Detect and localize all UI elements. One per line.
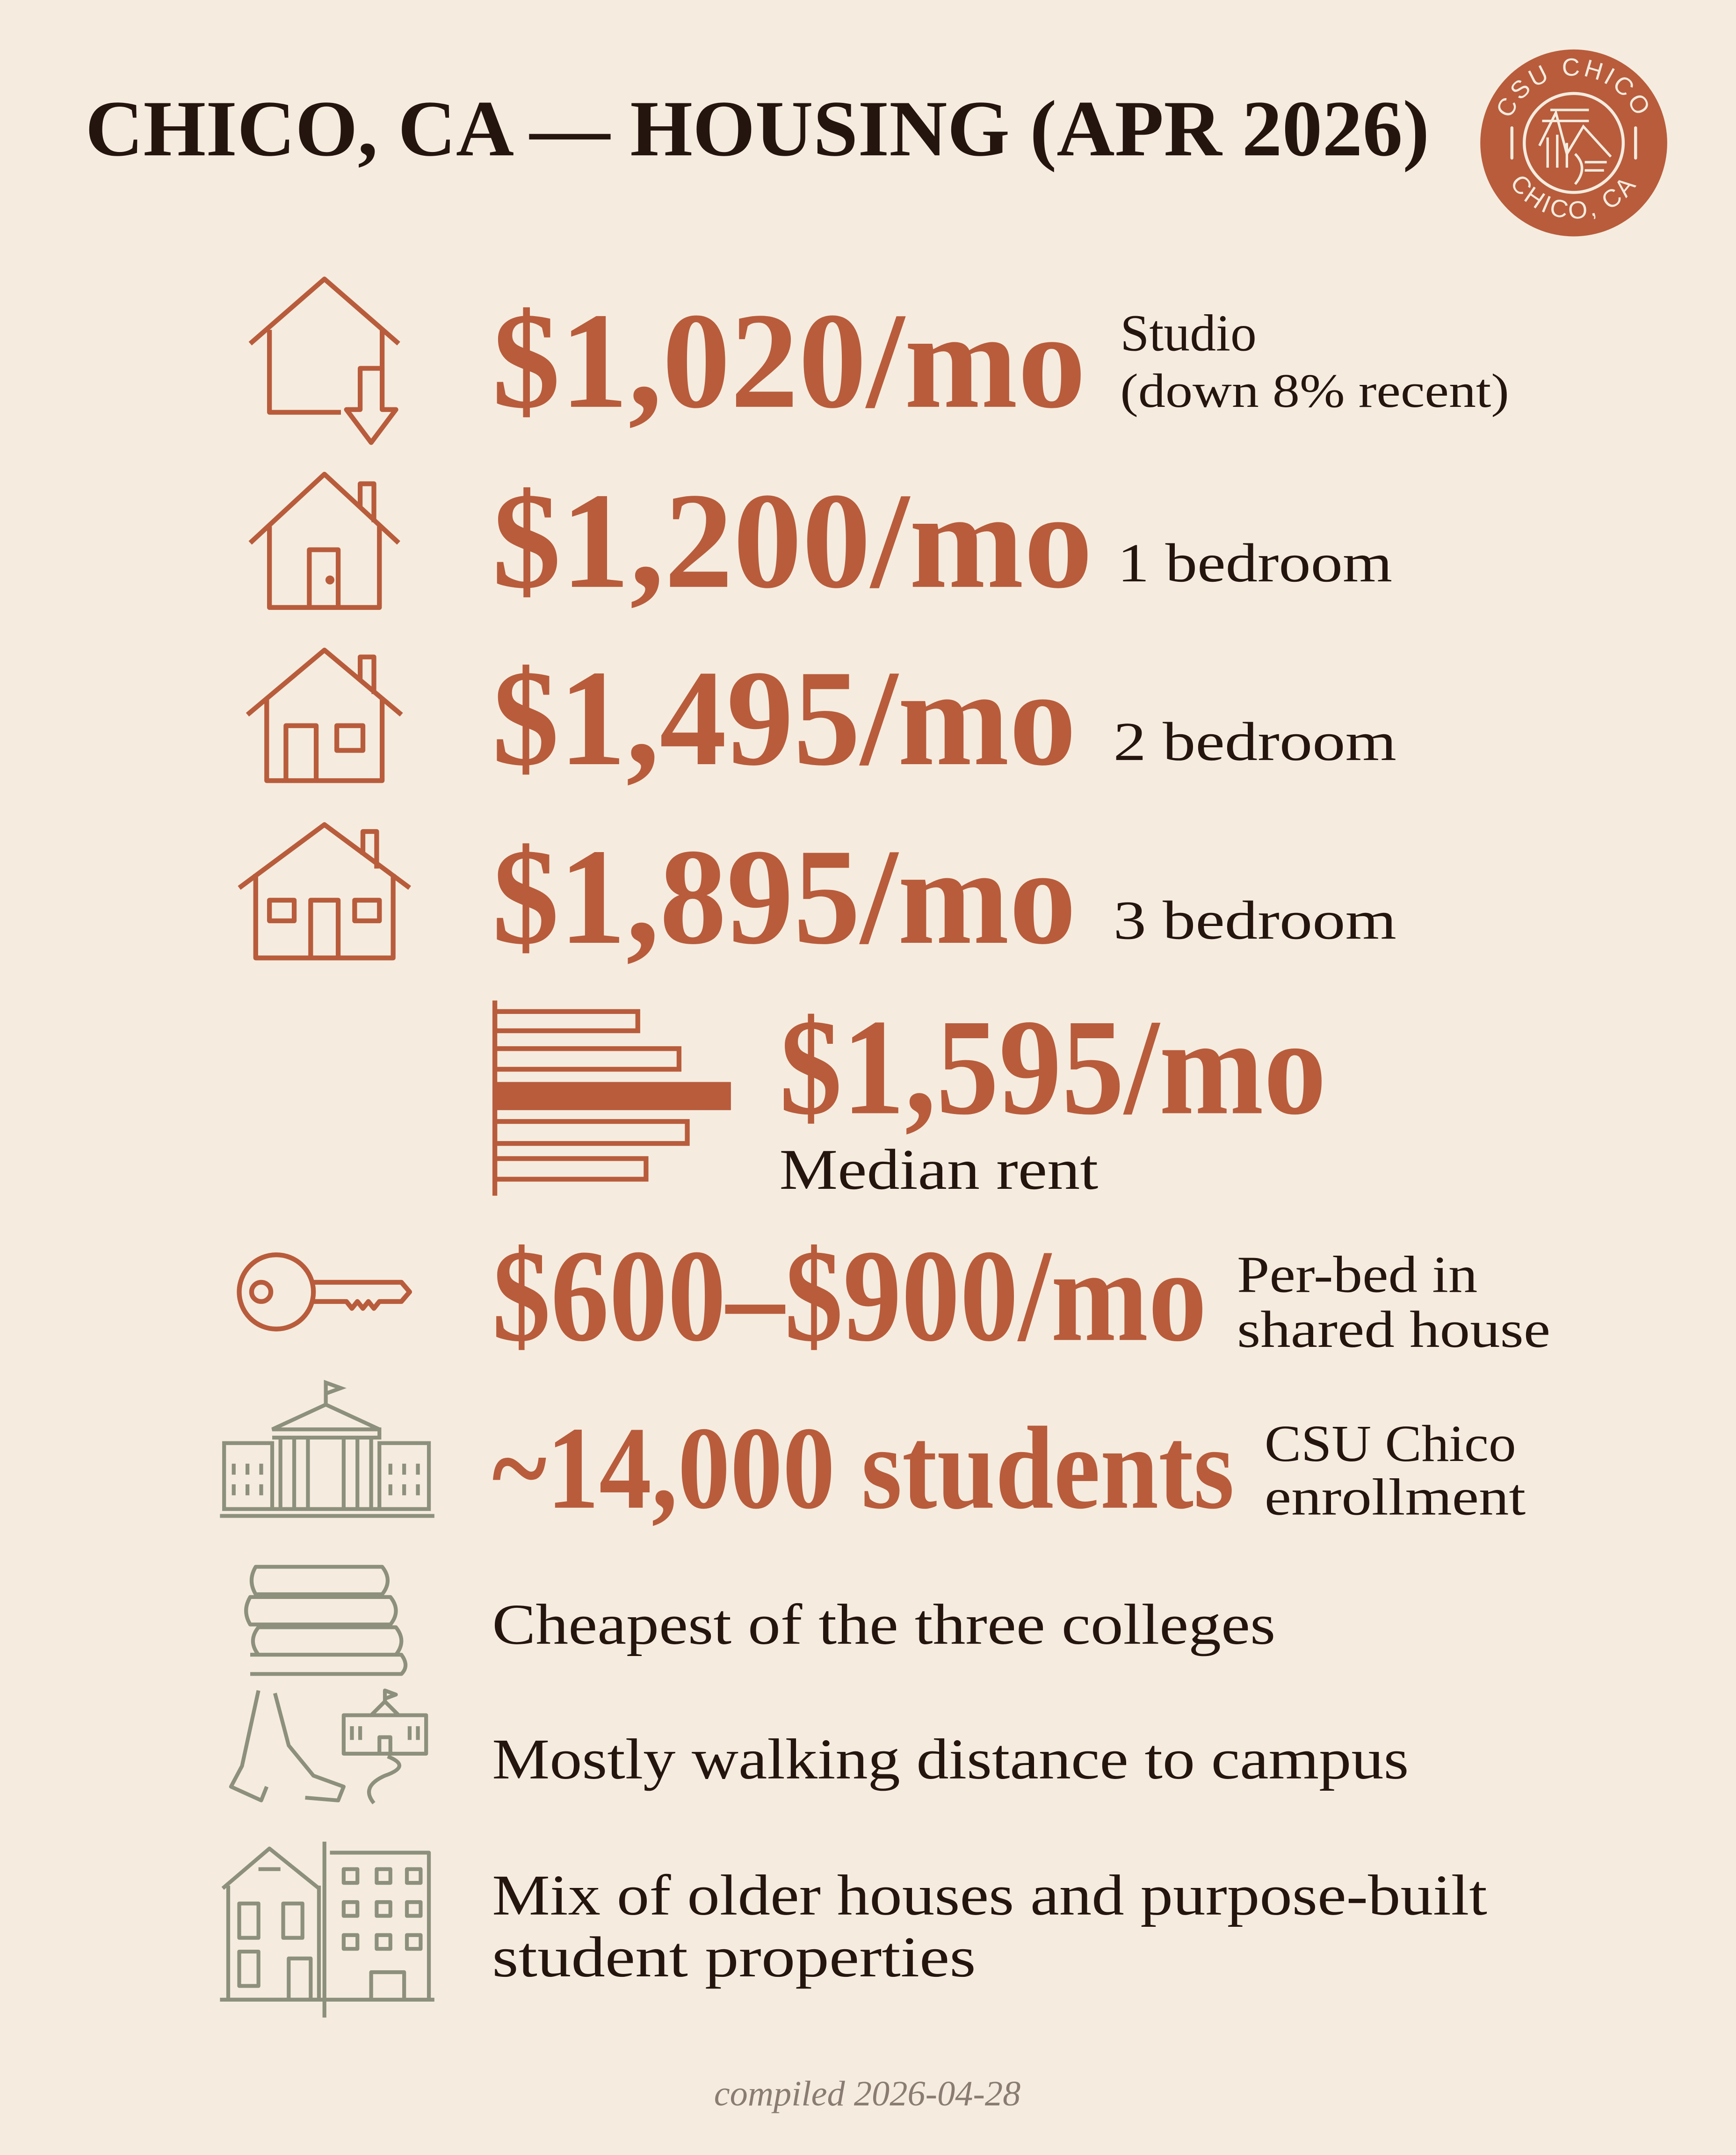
label: studio: (down 8% recent) [1120, 364, 1509, 418]
fact: housing mix [492, 1863, 1487, 1989]
label: enrollment: enrollment [1265, 1468, 1526, 1526]
icon: university building [220, 1382, 434, 1516]
title: CHICO, CA — HOUSING (APR 2026) [85, 84, 1429, 173]
fact: housing mix: Mix of older houses and purpose-built [492, 1863, 1487, 1927]
label: median rent: Median rent [779, 1137, 1098, 1201]
stat: enrollment: ~14,000 students [492, 1403, 1234, 1533]
label: studio [1120, 304, 1509, 418]
icon: walking to campus [231, 1691, 426, 1803]
price: 3 bedroom: $1,895/mo [492, 820, 1076, 973]
icon: 3 bedroom house [239, 824, 410, 958]
fact: housing mix: student properties [492, 1925, 976, 1989]
label: 2 bedroom: 2 bedroom [1114, 711, 1396, 772]
icon: 1 bedroom house [250, 474, 398, 607]
chart: rent distribution bars [495, 1000, 729, 1196]
icon: 2 bedroom house [247, 650, 401, 781]
price: median rent: $1,595/mo [779, 991, 1326, 1143]
label: per-bed [1237, 1245, 1550, 1359]
label: enrollment: CSU Chico [1265, 1415, 1516, 1473]
icon: key [239, 1255, 410, 1329]
footer: compiled 2026-04-28 [714, 2074, 1020, 2113]
logo: CSU Chico badge: CSU CHICO [1490, 53, 1657, 122]
label: per-bed: shared house [1237, 1301, 1550, 1359]
fact: cheapest: Cheapest of the three colleges [492, 1592, 1275, 1656]
label: enrollment [1265, 1415, 1526, 1526]
logo: CSU Chico badge [1480, 50, 1667, 236]
icon: houses and apartments [220, 1842, 434, 2018]
icon: books [246, 1567, 405, 1674]
price: 2 bedroom: $1,495/mo [492, 642, 1076, 794]
fact: walking: Mostly walking distance to campus [492, 1727, 1409, 1791]
logo: CSU Chico badge: CHICO, CA [1505, 169, 1642, 225]
label: per-bed: Per-bed in [1237, 1245, 1477, 1303]
price: studio: $1,020/mo [492, 284, 1086, 437]
label: studio: Studio [1120, 304, 1257, 362]
price: 1 bedroom: $1,200/mo [492, 464, 1092, 617]
price: per-bed: $600–$900/mo [492, 1223, 1207, 1369]
label: 3 bedroom: 3 bedroom [1114, 890, 1396, 951]
label: 1 bedroom: 1 bedroom [1117, 533, 1392, 593]
icon: studio house with down arrow [250, 279, 398, 442]
